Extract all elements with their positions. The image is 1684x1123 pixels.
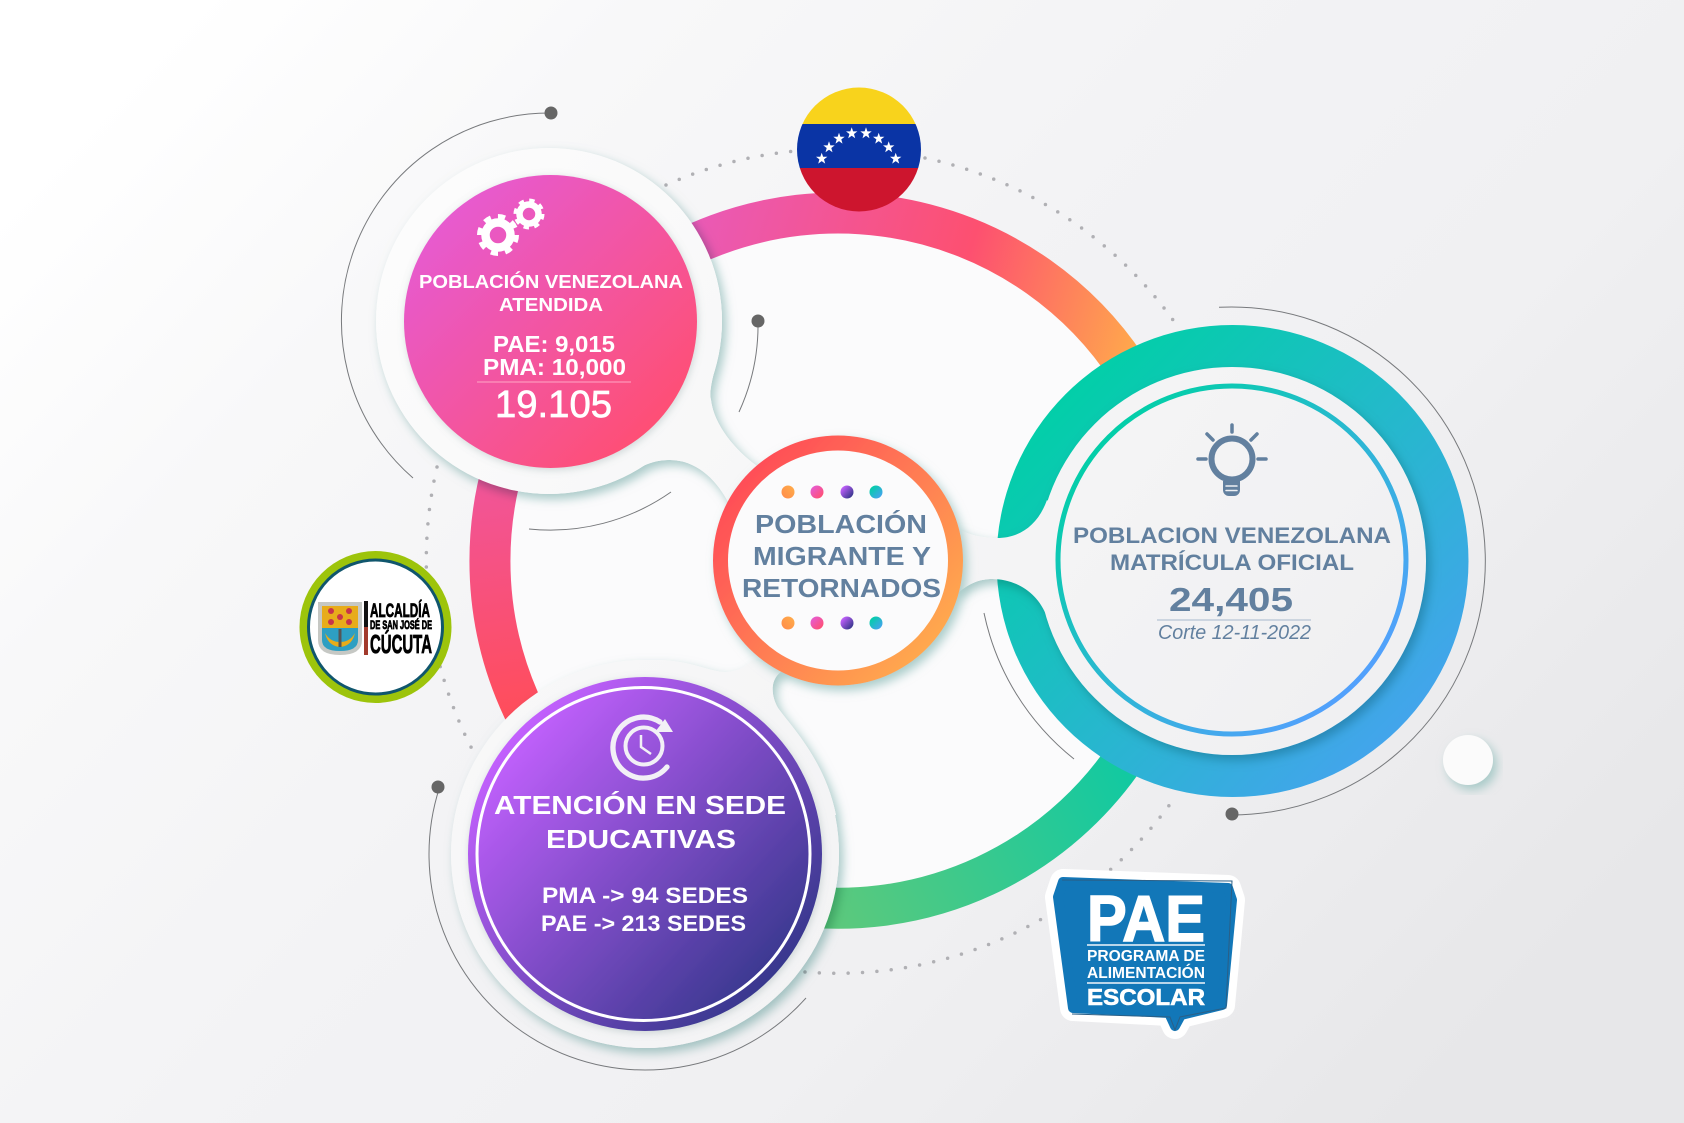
figures: PAE: 9,015 bbox=[493, 331, 615, 357]
heading: POBLACION VENEZOLANA bbox=[1073, 523, 1391, 548]
blob shadow layer bbox=[376, 148, 1426, 1048]
logo text: ESCOLAR bbox=[1087, 984, 1205, 1010]
figure: 24,405 bbox=[1169, 581, 1293, 618]
logo text: PROGRAMA DE bbox=[1087, 948, 1205, 965]
dots bbox=[782, 486, 882, 630]
panel: población migrante y retornados bbox=[713, 436, 963, 686]
heading bbox=[419, 271, 683, 315]
thin orbit lines with end dots bbox=[341, 106, 1485, 1070]
teal outer ring bbox=[996, 325, 1468, 797]
heading bbox=[742, 509, 941, 603]
logo: Alcaldía de Cúcuta bbox=[300, 551, 452, 703]
logo text bbox=[1087, 882, 1205, 1010]
heading: POBLACIÓN VENEZOLANA bbox=[419, 271, 683, 292]
dotted orbit bbox=[426, 151, 1173, 973]
icon: gears bbox=[480, 200, 542, 254]
panel: atención en sede educativas bbox=[468, 677, 822, 1031]
decorative white bubble bbox=[1443, 735, 1493, 785]
logo text: ALCALDÍA bbox=[370, 600, 430, 622]
figure: Corte 12-11-2022 bbox=[1158, 622, 1311, 644]
figure bbox=[1157, 581, 1311, 644]
heading: MATRÍCULA OFICIAL bbox=[1110, 550, 1354, 575]
ring interior bbox=[508, 231, 1168, 891]
large colour ring bbox=[490, 213, 1139, 908]
figures bbox=[541, 883, 748, 936]
logo text: PAE bbox=[1087, 882, 1205, 955]
figures: PMA -> 94 SEDES bbox=[542, 883, 748, 908]
icon: Venezuela flag bbox=[797, 87, 921, 214]
heading: MIGRANTE Y bbox=[753, 541, 931, 571]
heading: ATENCIÓN EN SEDE bbox=[494, 790, 786, 820]
logo text: CÚCUTA bbox=[370, 629, 432, 659]
icon: clock with arrow bbox=[613, 717, 673, 778]
panel: matrícula oficial bbox=[1058, 386, 1406, 734]
heading: ATENDIDA bbox=[499, 294, 603, 315]
raised white blobs and connectors bbox=[376, 148, 1426, 1048]
icon: light bulb bbox=[1198, 425, 1266, 496]
heading: EDUCATIVAS bbox=[546, 824, 736, 854]
figures: 19.105 bbox=[495, 384, 612, 426]
figures: PMA: 10,000 bbox=[483, 354, 626, 380]
heading: POBLACIÓN bbox=[755, 509, 927, 539]
heading: RETORNADOS bbox=[742, 573, 941, 603]
figures bbox=[477, 331, 631, 426]
coat of arms bbox=[318, 602, 362, 655]
logo: PAE speech bubble bbox=[1058, 880, 1232, 1030]
heading bbox=[494, 790, 786, 854]
logo text bbox=[370, 600, 432, 659]
logo text: ALIMENTACIÓN bbox=[1087, 963, 1205, 982]
logo text: DE SAN JOSÉ DE bbox=[370, 617, 432, 632]
figures: PAE -> 213 SEDES bbox=[541, 911, 746, 936]
heading bbox=[1073, 523, 1391, 575]
panel: población venezolana atendida bbox=[404, 175, 697, 468]
